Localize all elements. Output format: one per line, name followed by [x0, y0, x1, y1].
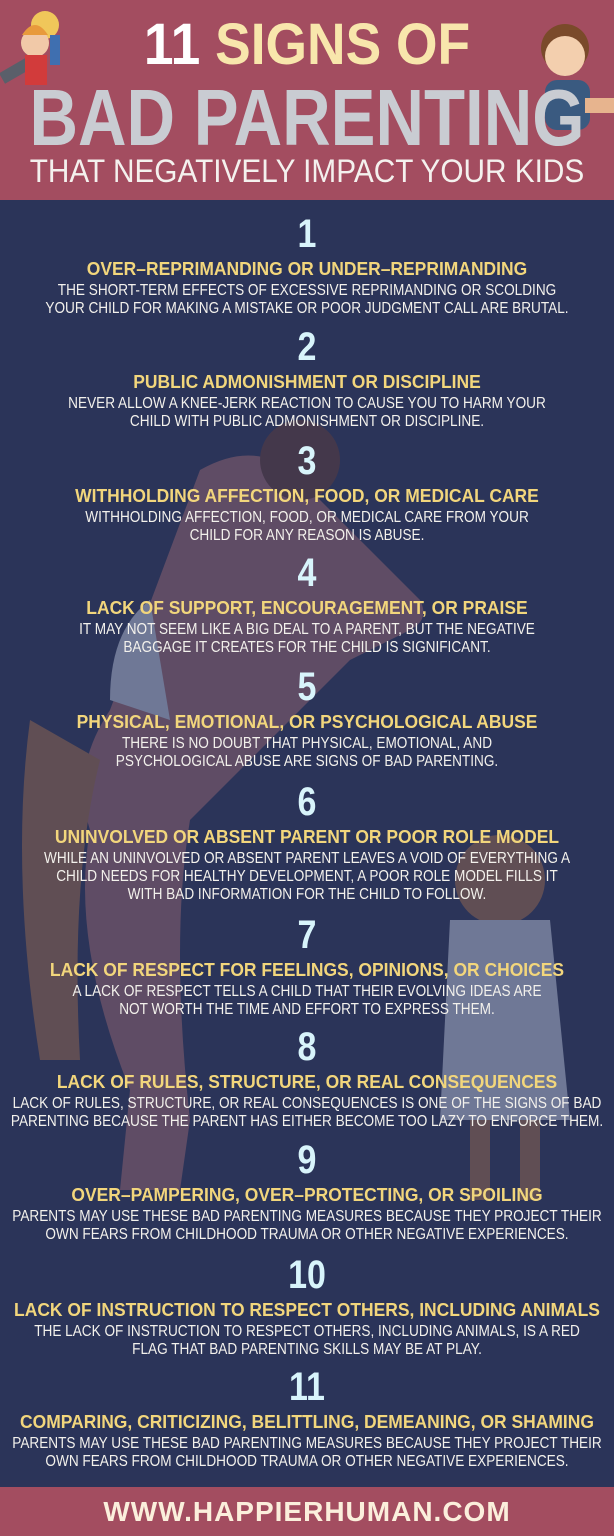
- item 10: LACK OF INSTRUCTION TO RESPECT OTHERS, INCLUDING ANIMALS: [14, 1300, 600, 1320]
- item 6: WITH BAD INFORMATION FOR THE CHILD TO FOLLOW.: [128, 886, 486, 903]
- item 5: PHYSICAL, EMOTIONAL, OR PSYCHOLOGICAL ABUSE: [77, 712, 537, 732]
- item 8: PARENTING BECAUSE THE PARENT HAS EITHER BECOME TOO LAZY TO ENFORCE THEM.: [11, 1113, 603, 1130]
- item 2: [68, 325, 546, 430]
- item 4: [79, 551, 535, 656]
- footer: WWW.HAPPIERHUMAN.COM: [103, 1496, 511, 1527]
- title line 1: 11 SIGNS OF: [144, 12, 470, 77]
- item 2: NEVER ALLOW A KNEE-JERK REACTION TO CAUSE YOU TO HARM YOUR: [68, 395, 546, 412]
- item 11: [12, 1365, 602, 1470]
- item 3: 3: [298, 439, 316, 483]
- item 10: FLAG THAT BAD PARENTING SKILLS MAY BE AT PLAY.: [132, 1341, 482, 1358]
- item 7: NOT WORTH THE TIME AND EFFORT TO EXPRESS THEM.: [119, 1001, 495, 1018]
- item 8: 8: [298, 1025, 316, 1069]
- item 5: 5: [298, 665, 316, 709]
- item 1: 1: [298, 212, 316, 256]
- item 8: LACK OF RULES, STRUCTURE, OR REAL CONSEQUENCES: [57, 1072, 557, 1092]
- item 3: WITHHOLDING AFFECTION, FOOD, OR MEDICAL CARE FROM YOUR: [85, 509, 529, 526]
- item 3: WITHHOLDING AFFECTION, FOOD, OR MEDICAL CARE: [75, 486, 539, 506]
- item 5: PSYCHOLOGICAL ABUSE ARE SIGNS OF BAD PARENTING.: [116, 753, 498, 770]
- item 7: [50, 913, 564, 1018]
- item 1: [45, 212, 569, 317]
- item 4: BAGGAGE IT CREATES FOR THE CHILD IS SIGNIFICANT.: [123, 639, 491, 656]
- background illustration: parent and child: [22, 420, 570, 1200]
- item 10: [14, 1253, 600, 1358]
- item 9: PARENTS MAY USE THESE BAD PARENTING MEASURES BECAUSE THEY PROJECT THEIR: [12, 1208, 602, 1225]
- item 6: UNINVOLVED OR ABSENT PARENT OR POOR ROLE MODEL: [55, 827, 559, 847]
- item 6: [44, 780, 570, 903]
- item 4: 4: [298, 551, 316, 595]
- item 7: LACK OF RESPECT FOR FEELINGS, OPINIONS, OR CHOICES: [50, 960, 564, 980]
- item 9: OWN FEARS FROM CHILDHOOD TRAUMA OR OTHER NEGATIVE EXPERIENCES.: [45, 1226, 569, 1243]
- item 8: [11, 1025, 603, 1130]
- item 2: CHILD WITH PUBLIC ADMONISHMENT OR DISCIPLINE.: [130, 413, 484, 430]
- item 11: PARENTS MAY USE THESE BAD PARENTING MEASURES BECAUSE THEY PROJECT THEIR: [12, 1435, 602, 1452]
- item 11: COMPARING, CRITICIZING, BELITTLING, DEMEANING, OR SHAMING: [20, 1412, 594, 1432]
- item 1: YOUR CHILD FOR MAKING A MISTAKE OR POOR JUDGMENT CALL ARE BRUTAL.: [45, 300, 569, 317]
- item 11: 11: [289, 1365, 325, 1409]
- item 5: [77, 665, 537, 770]
- item 2: PUBLIC ADMONISHMENT OR DISCIPLINE: [133, 372, 481, 392]
- item 6: CHILD NEEDS FOR HEALTHY DEVELOPMENT, A POOR ROLE MODEL FILLS IT: [56, 868, 558, 885]
- item 9: [12, 1138, 602, 1243]
- item 4: LACK OF SUPPORT, ENCOURAGEMENT, OR PRAISE: [86, 598, 528, 618]
- subtitle: THAT NEGATIVELY IMPACT YOUR KIDS: [30, 153, 584, 189]
- item 3: CHILD FOR ANY REASON IS ABUSE.: [190, 527, 424, 544]
- item 9: OVER–PAMPERING, OVER–PROTECTING, OR SPOILING: [71, 1185, 543, 1205]
- icon: scared kid right: [541, 24, 614, 130]
- title line 2: BAD PARENTING: [29, 73, 585, 162]
- item 10: THE LACK OF INSTRUCTION TO RESPECT OTHERS, INCLUDING ANIMALS, IS A RED: [34, 1323, 580, 1340]
- header band: [0, 0, 614, 200]
- item 7: A LACK OF RESPECT TELLS A CHILD THAT THEIR EVOLVING IDEAS ARE: [72, 983, 542, 1000]
- icon: angry kid left: [0, 11, 60, 85]
- item 9: 9: [298, 1138, 316, 1182]
- item 6: WHILE AN UNINVOLVED OR ABSENT PARENT LEAVES A VOID OF EVERYTHING A: [44, 850, 570, 867]
- item 2: 2: [298, 325, 316, 369]
- item 1: THE SHORT-TERM EFFECTS OF EXCESSIVE REPRIMANDING OR SCOLDING: [58, 282, 556, 299]
- item 7: 7: [298, 913, 316, 957]
- item 11: OWN FEARS FROM CHILDHOOD TRAUMA OR OTHER NEGATIVE EXPERIENCES.: [45, 1453, 569, 1470]
- item 1: OVER–REPRIMANDING OR UNDER–REPRIMANDING: [87, 259, 527, 279]
- item 10: 10: [288, 1253, 326, 1297]
- item 4: IT MAY NOT SEEM LIKE A BIG DEAL TO A PARENT, BUT THE NEGATIVE: [79, 621, 535, 638]
- item 3: [75, 439, 539, 544]
- item 5: THERE IS NO DOUBT THAT PHYSICAL, EMOTIONAL, AND: [122, 735, 492, 752]
- footer: [0, 1487, 614, 1536]
- item 6: 6: [298, 780, 316, 824]
- item 8: LACK OF RULES, STRUCTURE, OR REAL CONSEQUENCES IS ONE OF THE SIGNS OF BAD: [13, 1095, 601, 1112]
